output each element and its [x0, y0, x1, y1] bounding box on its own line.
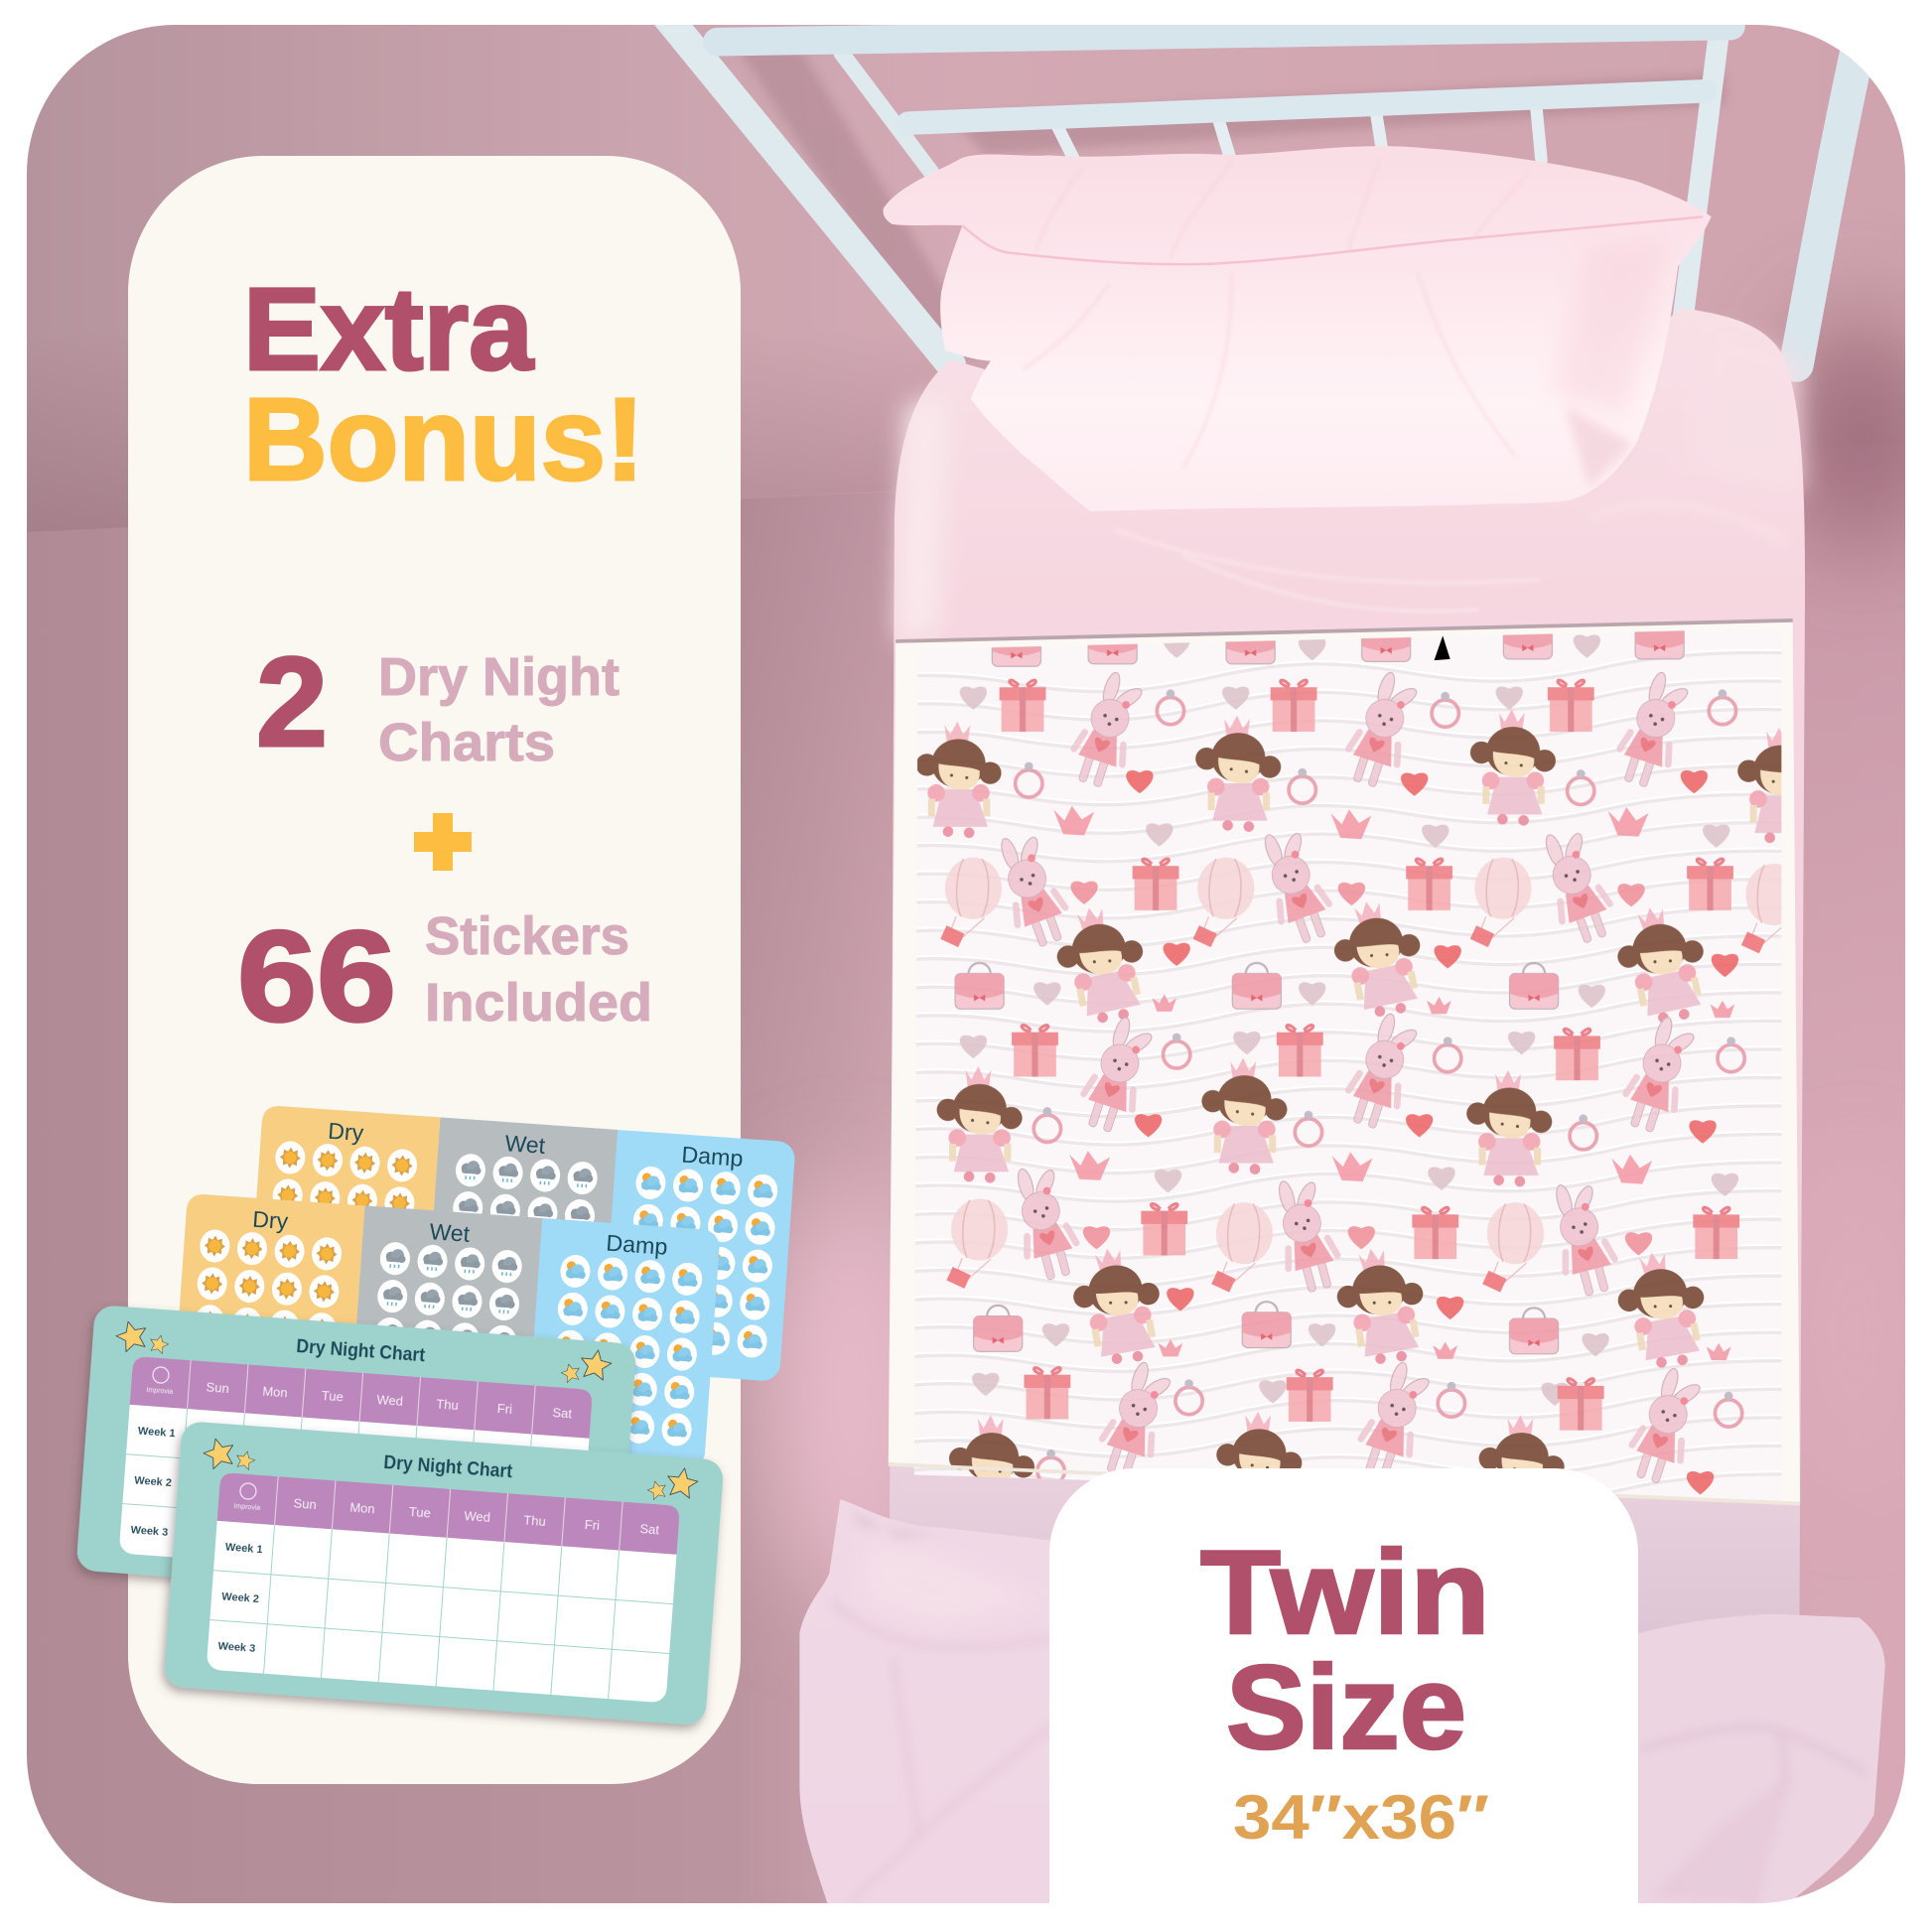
chart card front: Improvia: [233, 1503, 261, 1512]
sticker sheet back: Dry: [328, 1118, 365, 1146]
printed pattern: [917, 630, 1781, 1495]
number: 66: 66: [237, 903, 396, 1048]
chart card back: Week 2: [134, 1474, 172, 1489]
chart card back: Thu: [436, 1396, 459, 1413]
sticker sheet front: Dry: [252, 1206, 290, 1234]
panel: extra bonus: [128, 156, 741, 1784]
bedroom floor: [0, 443, 1932, 1932]
sticker sheet back: [246, 1105, 796, 1382]
chart card back: [75, 1305, 637, 1609]
wall shadows: [740, 50, 1932, 554]
chart card front: Sat: [639, 1521, 660, 1537]
pillow: [883, 146, 1712, 511]
comforter left: [799, 1499, 1059, 1932]
chart card back: Sun: [206, 1379, 229, 1396]
chart card front: Mon: [349, 1500, 375, 1516]
label: Stickers Included: Included: [425, 973, 652, 1033]
chart card front: Week 1: [224, 1542, 263, 1556]
chart card front: Tue: [408, 1504, 431, 1521]
chart card front: Dry Night Chart: [383, 1452, 513, 1482]
label: Stickers Included: [425, 906, 652, 1033]
stars on back card: [113, 1317, 614, 1383]
chart card front: Wed: [464, 1508, 490, 1525]
waterproof pad: [803, 613, 1909, 1532]
label: Dry Night Charts: Charts: [378, 713, 555, 772]
chart card back: Week 3: [130, 1524, 169, 1539]
chart card front: Sun: [293, 1495, 317, 1512]
chart card front: Week 3: [217, 1640, 256, 1655]
floor shading: [740, 443, 1932, 1601]
chart card front: [163, 1421, 725, 1725]
chart card back: Dry Night Chart: [296, 1336, 426, 1366]
chart card back: Mon: [262, 1384, 288, 1400]
fitted sheet: [890, 308, 1805, 1725]
panel: twin size: [1049, 1468, 1638, 1932]
number: 2: 2: [256, 631, 328, 773]
sheet highlights: [897, 333, 1803, 640]
chart card back: Week 1: [137, 1426, 176, 1440]
chart card front: Week 2: [221, 1590, 259, 1605]
sticker sheet back: Damp: [681, 1142, 744, 1172]
sticker sheet front: Wet: [429, 1218, 472, 1247]
heading: Extra: Extra: [243, 264, 534, 395]
chart card back: Wed: [376, 1392, 403, 1409]
label: Dry Night Charts: Dry Night: [378, 647, 620, 707]
chart card front: Fri: [584, 1517, 601, 1533]
chart card back: Tue: [321, 1388, 344, 1405]
black triangle mark: [1435, 635, 1450, 660]
quilted wave stitching: [914, 630, 1781, 1495]
sticker sheet front: Damp: [606, 1230, 668, 1260]
bedroom wall: [0, 0, 1932, 542]
sticker sheet back: Wet: [504, 1130, 547, 1159]
chart card back: Improvia: [146, 1387, 174, 1396]
label: Stickers Included: Stickers: [425, 906, 629, 966]
chart card back: Fri: [496, 1401, 513, 1417]
comforter right: [1632, 1614, 1885, 1922]
dimensions: 34″x36″: [1233, 1783, 1489, 1853]
chart card front: Thu: [523, 1512, 546, 1529]
icon: plus: [414, 813, 472, 871]
heading: Bonus!: Bonus!: [243, 374, 644, 505]
label: Dry Night Charts: [378, 647, 620, 772]
bed frame: [665, 15, 1861, 364]
chart card back: Sat: [552, 1405, 573, 1421]
heading: Size: Size: [1226, 1641, 1466, 1774]
sticker sheet front: [171, 1193, 721, 1470]
stars on front card: [201, 1435, 700, 1500]
heading: Twin: Twin: [1200, 1526, 1490, 1659]
